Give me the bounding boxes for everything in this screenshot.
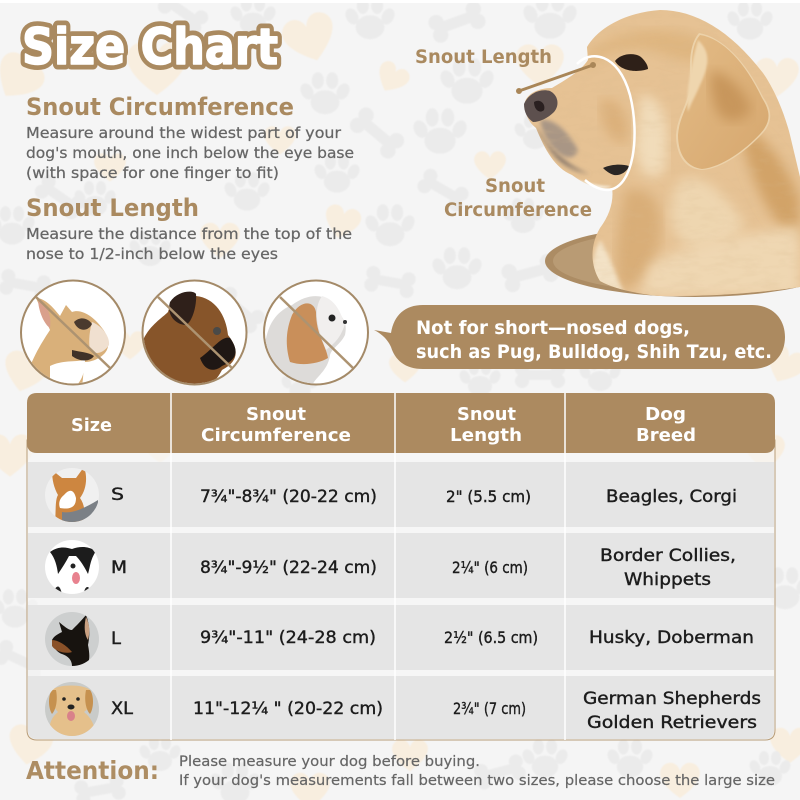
description: snout length: nose to 1/2-inch below the eyes xyxy=(26,245,278,263)
row: S: 2" (5.5 cm) xyxy=(446,487,531,506)
description: snout circumference: (with space for one finger to fit) xyxy=(26,164,279,182)
attention heading: Attention: xyxy=(26,756,159,785)
row: XL: 11"-12¼ " (20-22 cm) xyxy=(193,699,383,719)
prohibited dog: French bulldog xyxy=(21,280,125,390)
attention note: If your dog's measurements fall between two sizes, please choose the large size xyxy=(179,773,775,789)
row: L: 2½" (6.5 cm) xyxy=(444,628,538,647)
table header: Circumference xyxy=(201,425,351,446)
row: L: Husky, Doberman xyxy=(589,628,754,648)
row: M: 8¾"-9½" (22-24 cm) xyxy=(200,558,377,578)
description: snout circumference xyxy=(26,124,354,182)
base ellipse under the dog xyxy=(545,225,800,297)
row: XL: 2¾" (7 cm) xyxy=(453,699,526,718)
row: S xyxy=(28,462,774,527)
text block: snout length xyxy=(26,194,352,263)
row: S: Beagles, Corgi xyxy=(606,487,737,507)
row: M: Border Collies, xyxy=(600,546,736,566)
row: L: 9¾"-11" (24-28 cm) xyxy=(200,628,376,648)
attention note xyxy=(179,754,775,789)
table header: Snout xyxy=(246,404,306,425)
table header: Size xyxy=(71,415,112,436)
title: Size Chart xyxy=(22,18,278,76)
row: M xyxy=(28,533,774,598)
callout: not for short-nosed dogs xyxy=(374,305,785,369)
callout: not for short-nosed dogs: Not for short—nosed dogs, xyxy=(416,317,690,339)
illustration: golden retriever head xyxy=(520,0,800,300)
description: snout circumference: Measure around the widest part of your xyxy=(26,124,342,142)
icon: nose xyxy=(524,90,557,122)
table header: Dog xyxy=(645,404,686,425)
prohibited dog: Shih Tzu xyxy=(264,280,368,385)
heading: snout circumference: Snout Circumference xyxy=(26,93,294,121)
row: L: L xyxy=(111,629,122,649)
heading: snout length: Snout Length xyxy=(26,194,199,222)
avatar: border collie xyxy=(45,540,99,594)
icon: ear xyxy=(676,33,770,170)
table header xyxy=(27,393,775,453)
text block: snout circumference xyxy=(26,93,354,182)
row: XL: Golden Retrievers xyxy=(587,713,757,733)
row: M: Whippets xyxy=(624,570,711,590)
row: XL xyxy=(28,676,774,739)
row: S: S xyxy=(111,485,124,505)
attention note: Please measure your dog before buying. xyxy=(179,754,480,770)
measurement: snout length line xyxy=(516,62,596,94)
icon: eye xyxy=(615,54,648,71)
table rows backdrop xyxy=(27,440,775,740)
table header: Length xyxy=(450,425,522,446)
label: snout circumference xyxy=(444,175,592,221)
callout: not for short-nosed dogs: such as Pug, Bulldog, Shih Tzu, etc. xyxy=(416,341,772,363)
row: XL: XL xyxy=(111,699,134,719)
icon: mouth xyxy=(603,165,629,175)
row: L xyxy=(28,605,774,670)
avatar: corgi xyxy=(45,467,99,525)
title: Size Chart xyxy=(22,18,278,76)
label: snout length: Snout Length xyxy=(415,46,552,68)
prohibited dog: Pug xyxy=(142,280,246,390)
table header: Snout xyxy=(457,404,516,425)
avatar: doberman xyxy=(45,612,99,666)
label: snout circumference: Snout xyxy=(485,175,545,197)
top edge xyxy=(0,0,800,3)
label: snout circumference: Circumference xyxy=(444,199,592,221)
row: M: M xyxy=(111,558,127,578)
measurement: snout circumference loop xyxy=(577,56,635,190)
row: S: 7¾"-8¾" (20-22 cm) xyxy=(200,487,377,507)
description: snout length xyxy=(26,225,352,263)
description: snout circumference: dog's mouth, one inch below the eye base xyxy=(26,144,354,162)
row: M: 2¼" (6 cm) xyxy=(452,558,528,577)
table: size chart xyxy=(27,393,775,740)
avatar: golden retriever xyxy=(45,682,99,738)
table header: Breed xyxy=(636,425,696,446)
description: snout length: Measure the distance from the top of the xyxy=(26,225,352,243)
row: XL: German Shepherds xyxy=(583,689,761,709)
